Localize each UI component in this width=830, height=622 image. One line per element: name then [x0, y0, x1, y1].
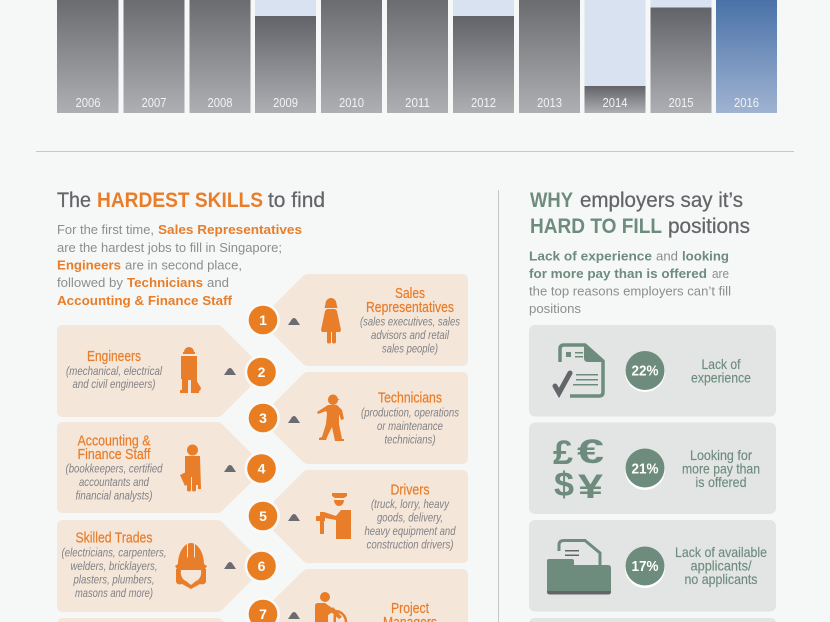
icon: folder — [547, 540, 611, 594]
bar 2013: 2013 — [537, 96, 562, 110]
bar 2006 — [57, 0, 118, 113]
heading: hardest skills: HARDEST SKILLS — [97, 189, 263, 212]
bar 2009 — [255, 0, 316, 113]
panel: skilled trades: 6 — [258, 558, 266, 574]
panel: engineers — [57, 325, 278, 417]
card: lack of available applicants — [529, 520, 776, 612]
panel: drivers — [246, 470, 468, 563]
icon: technician — [317, 394, 344, 441]
panel: engineers: and civil engineers) — [72, 377, 156, 391]
icon: engineer — [180, 347, 201, 393]
panel: accounting and finance staff: Accounting & — [78, 434, 151, 450]
card: looking for more pay: 21% — [632, 462, 659, 478]
panel: sales representatives — [246, 274, 468, 366]
bar 2009: 2009 — [273, 96, 298, 110]
card: looking for more pay: more pay than — [682, 460, 760, 476]
bar 2011: 2011 — [405, 96, 430, 110]
panel: engineers: 2 — [258, 364, 266, 380]
panel: accounting and finance staff: 4 — [258, 460, 266, 476]
panel: drivers: Drivers — [390, 482, 430, 498]
card: lack of experience: experience — [691, 370, 751, 386]
panel: engineers: Engineers — [87, 349, 141, 365]
panel: drivers: heavy equipment and — [364, 524, 456, 538]
heading: why employers: WHY — [530, 189, 573, 212]
bar 2012: 2012 — [471, 96, 496, 110]
intro text: hardest skills: Technicians — [127, 275, 203, 290]
panel: accounting and finance staff: (bookkeepers, certified — [66, 462, 163, 476]
bar 2014: 2014 — [602, 96, 628, 110]
intro text: hardest skills: Accounting & Finance Staff — [57, 293, 233, 308]
intro text: hardest skills: followed by — [57, 275, 123, 290]
heading: why employers — [530, 189, 750, 238]
heading: hardest skills — [57, 189, 325, 212]
bar 2010: 2010 — [339, 96, 364, 110]
panel: skilled trades: plasters, plumbers, — [73, 572, 154, 586]
panel: eighth skill, cropped — [57, 618, 224, 622]
heading: why employers: employers say it’s — [580, 189, 743, 212]
bar 2007 — [124, 0, 184, 113]
panel: sales representatives: sales people) — [382, 342, 438, 356]
intro text: why employers: positions — [529, 301, 582, 316]
intro text: why employers: looking — [682, 248, 729, 264]
intro text: why employers: and — [656, 248, 678, 264]
panel: drivers: construction drivers) — [366, 538, 454, 552]
bar 2015 — [650, 0, 712, 113]
card: lack of experience — [529, 325, 776, 416]
panel: drivers: 5 — [259, 508, 267, 524]
intro text: hardest skills: are in second place, — [125, 258, 242, 272]
bar 2007: 2007 — [142, 96, 167, 110]
panel: accounting and finance staff — [57, 422, 278, 513]
intro text: hardest skills: Engineers — [57, 258, 121, 272]
bar chart: years 2006-2016 — [57, 0, 777, 113]
intro text: why employers: the top reasons employers can’t fill — [529, 284, 731, 298]
intro text: why employers: are — [712, 266, 729, 281]
heading: why employers: HARD TO FILL — [530, 215, 662, 238]
icon: project manager — [315, 592, 346, 622]
icon: document with check — [555, 345, 603, 396]
panel: project managers: 7 — [259, 606, 267, 622]
panel: drivers: goods, delivery, — [377, 510, 443, 524]
panel: sales representatives: (sales executives, sales — [360, 314, 460, 328]
panel: skilled trades: welders, bricklayers, — [70, 559, 158, 573]
icon: accountant — [180, 444, 201, 492]
card: fourth reason, cropped — [529, 618, 776, 622]
bar 2012 — [453, 0, 514, 113]
icon: currency symbols: £ — [553, 434, 573, 472]
card: lack of available applicants: applicants/ — [690, 558, 752, 574]
card: looking for more pay: Looking for — [690, 447, 752, 463]
bar 2008: 2008 — [208, 96, 233, 110]
intro text: why employers: Lack of experience — [529, 248, 652, 264]
bar 2014 — [584, 0, 646, 113]
intro text: why employers: for more pay than is offered — [529, 266, 707, 281]
bar 2010 — [321, 0, 382, 113]
card: looking for more pay: is offered — [696, 474, 746, 490]
icon: currency symbols — [553, 433, 604, 506]
bar 2016: 2016 — [734, 96, 759, 110]
panel: project managers — [246, 569, 468, 622]
panel: drivers: (truck, lorry, heavy — [371, 497, 450, 511]
panel: skilled trades: masons and more) — [75, 586, 153, 600]
icon: woman — [321, 298, 341, 344]
panel: sales representatives: Representatives — [366, 300, 454, 316]
icon: currency symbols: € — [577, 433, 604, 471]
panel: accounting and finance staff: Finance Staff — [78, 447, 151, 463]
card: lack of experience: 22% — [632, 364, 659, 380]
intro text: hardest skills — [57, 222, 302, 308]
panel: sales representatives: advisors and retail — [371, 328, 449, 342]
intro text: hardest skills: and — [207, 275, 229, 290]
bar 2016 — [716, 0, 777, 113]
bar 2013 — [519, 0, 580, 113]
panel: project managers: Project — [391, 601, 429, 617]
heading: hardest skills: to find — [268, 189, 325, 212]
bar 2006: 2006 — [76, 96, 101, 110]
card: lack of available applicants: no applicants — [684, 571, 758, 587]
heading: hardest skills: The — [57, 189, 91, 212]
panel: skilled trades — [57, 520, 278, 612]
panel: technicians: (production, operations — [361, 406, 459, 420]
panel: accounting and finance staff: accountants and — [79, 475, 149, 489]
bar 2015: 2015 — [668, 96, 694, 110]
card: lack of available applicants: Lack of available — [675, 544, 767, 560]
icon: driver — [316, 493, 351, 539]
panel: accounting and finance staff: financial analysts) — [76, 488, 152, 502]
panel: technicians: or maintenance — [377, 419, 443, 433]
bar 2011 — [387, 0, 448, 113]
panel: sales representatives: Sales — [395, 286, 425, 302]
panel: skilled trades: (electricians, carpenters, — [62, 546, 166, 560]
panel: sales representatives: 1 — [259, 312, 267, 328]
icon: currency symbols: ¥ — [578, 468, 603, 506]
card: lack of experience: Lack of — [702, 356, 741, 372]
panel: technicians — [246, 372, 468, 464]
panel: technicians: 3 — [259, 410, 267, 426]
panel: engineers: (mechanical, electrical — [66, 364, 162, 378]
icon: currency symbols: $ — [554, 466, 574, 504]
intro text: hardest skills: are the hardest jobs to fill in Singapore; — [57, 240, 282, 255]
heading: why employers: positions — [668, 215, 750, 238]
icon: hard hat — [175, 543, 207, 589]
panel: skilled trades: Skilled Trades — [76, 530, 152, 546]
bar 2008 — [190, 0, 250, 113]
card: lack of available applicants: 17% — [632, 559, 659, 575]
intro text: hardest skills: For the first time, — [57, 222, 154, 237]
intro text: hardest skills: Sales Representatives — [158, 222, 302, 237]
intro text: why employers — [529, 248, 731, 316]
panel: technicians: technicians) — [384, 432, 436, 446]
panel: technicians: Technicians — [378, 390, 442, 406]
card: looking for more pay — [529, 422, 776, 514]
